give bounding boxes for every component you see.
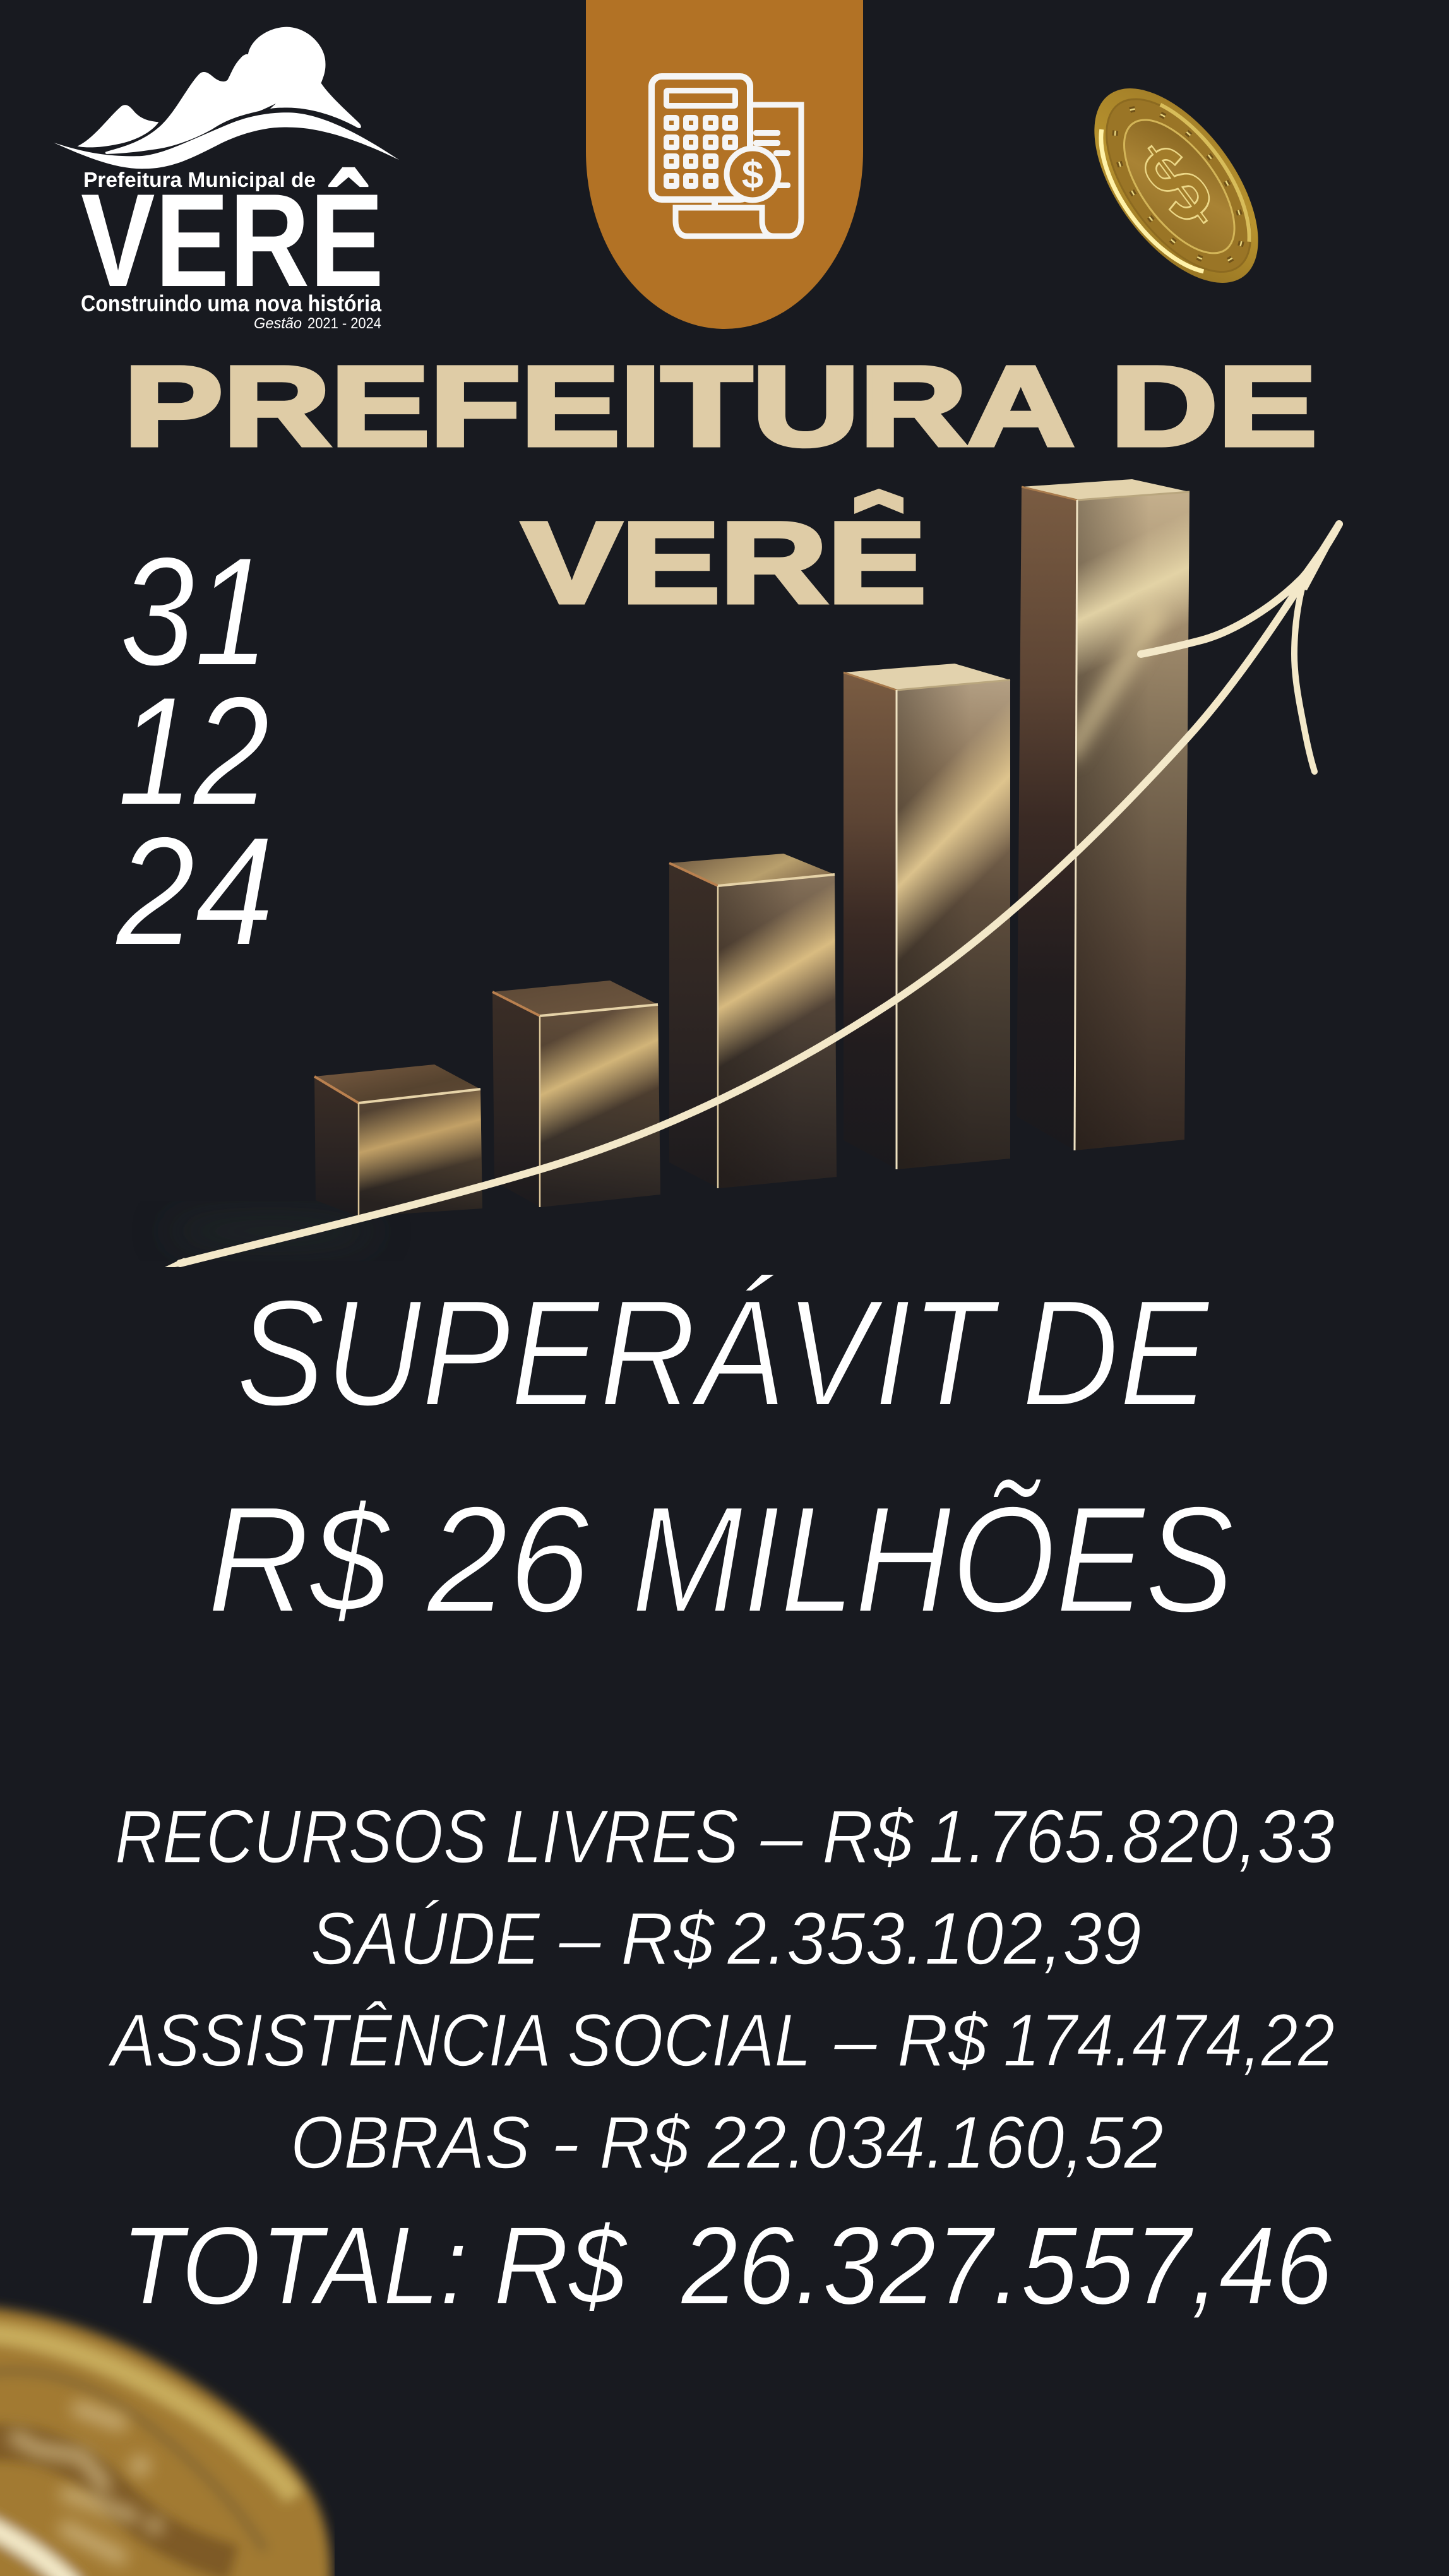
headline: SUPERÁVIT DE: SUPERÁVIT [236, 1268, 1001, 1438]
dollar coin: $ [742, 153, 763, 197]
coin centre [1103, 102, 1255, 271]
line: total: 26.327.557,46 [680, 2204, 1332, 2328]
line: recursos livres: – [760, 1794, 804, 1879]
calculator screen [667, 91, 735, 106]
date: 31 12 24 [115, 525, 274, 977]
breakdown list [108, 1794, 1335, 2328]
line: saúde: 2.353.102,39 [727, 1897, 1142, 1981]
line: recursos livres: RECURSOS LIVRES [115, 1794, 739, 1879]
arrowhead left branch [1141, 524, 1339, 654]
receipt lines [712, 130, 790, 208]
headline: SUPERÁVIT DE: DE [1022, 1268, 1210, 1438]
arrow tail tip [165, 1258, 187, 1267]
icon: gold coin top right [1063, 60, 1290, 311]
logo: Prefeitura Municipal de Verê [54, 27, 399, 332]
logo text: Gestão: Gestão [254, 315, 302, 332]
line: saúde: – [558, 1897, 602, 1981]
year: 24 [115, 804, 274, 977]
coin dollar sign: $ [1121, 120, 1233, 248]
bar chart: five golden 3D bars [164, 479, 1190, 1246]
line: total: TOTAL: [121, 2204, 468, 2328]
title: VERÊ [522, 474, 928, 627]
line: total: R$ [494, 2204, 628, 2328]
arrowhead tip wedge [1292, 524, 1339, 590]
line: obras [290, 2101, 1164, 2185]
line: assistência social: 174.474,22 [1003, 1999, 1335, 2082]
logo mark: mountains and swoosh [54, 27, 399, 169]
coin highlight arcs [1080, 129, 1206, 286]
orange pill banner with calculator icon [586, 0, 863, 329]
blurred dollar sign highlights [16, 2409, 161, 2557]
logo text: VERÊ: VERÊ [81, 166, 384, 314]
circumflex accent [833, 474, 928, 521]
line: obras: - [550, 2101, 580, 2185]
line: obras: R$ [599, 2101, 691, 2185]
line: assistência social [108, 1999, 1335, 2082]
arrow: rising growth curve [165, 524, 1339, 1267]
coin stars ring [1091, 88, 1267, 283]
logo text: years: 2021 - 2024 [307, 315, 381, 332]
title word: VERÊ [522, 498, 926, 627]
arrow shaft [180, 524, 1339, 1263]
arrowhead right branch [1294, 588, 1315, 772]
headline: R$ 26 MILHÕES: MILHÕES [631, 1475, 1234, 1645]
line: recursos livres [115, 1794, 1335, 1879]
bar 1 [314, 1064, 482, 1217]
bar 3 [669, 854, 837, 1188]
logo text: Prefeitura Municipal de: Prefeitura Municipal de [83, 168, 316, 191]
line: total [121, 2204, 1332, 2328]
month: 12 [117, 664, 270, 837]
line: saúde [311, 1897, 1142, 1981]
bar 2 [492, 981, 660, 1207]
line: obras: OBRAS [290, 2101, 530, 2185]
calculator body [652, 76, 750, 200]
title: PREFEITURA DE: PREFEITURA DE [124, 343, 1317, 469]
day: 31 [120, 525, 269, 698]
bar 4 [844, 664, 1010, 1169]
headline: R$ 26 MILHÕES [207, 1475, 1234, 1645]
logo text: slogan: Construindo uma nova história [81, 290, 382, 316]
receipt [676, 105, 801, 236]
line: saúde: R$ [621, 1897, 715, 1981]
headline: R$ 26 MILHÕES: 26 [426, 1475, 590, 1645]
headline: R$ 26 MILHÕES: R$ [207, 1475, 391, 1645]
icon: calculator, receipt and coin [652, 76, 801, 236]
line: recursos livres: R$ [822, 1794, 914, 1879]
line: assistência social: – [833, 1999, 878, 2082]
icon: blurred gold coin bottom left [0, 2306, 331, 2576]
line: obras: 22.034.160,52 [707, 2101, 1164, 2185]
pill shape [586, 0, 863, 329]
dollar coin [727, 148, 778, 200]
line: saúde: SAÚDE [311, 1897, 540, 1981]
line: recursos livres: 1.765.820,33 [929, 1794, 1335, 1879]
bar 5 [1017, 479, 1190, 1150]
calculator keys [664, 115, 738, 189]
line: assistência social: R$ [897, 1999, 989, 2082]
key holes [669, 121, 732, 183]
line: assistência social: ASSISTÊNCIA SOCIAL [108, 1999, 811, 2082]
